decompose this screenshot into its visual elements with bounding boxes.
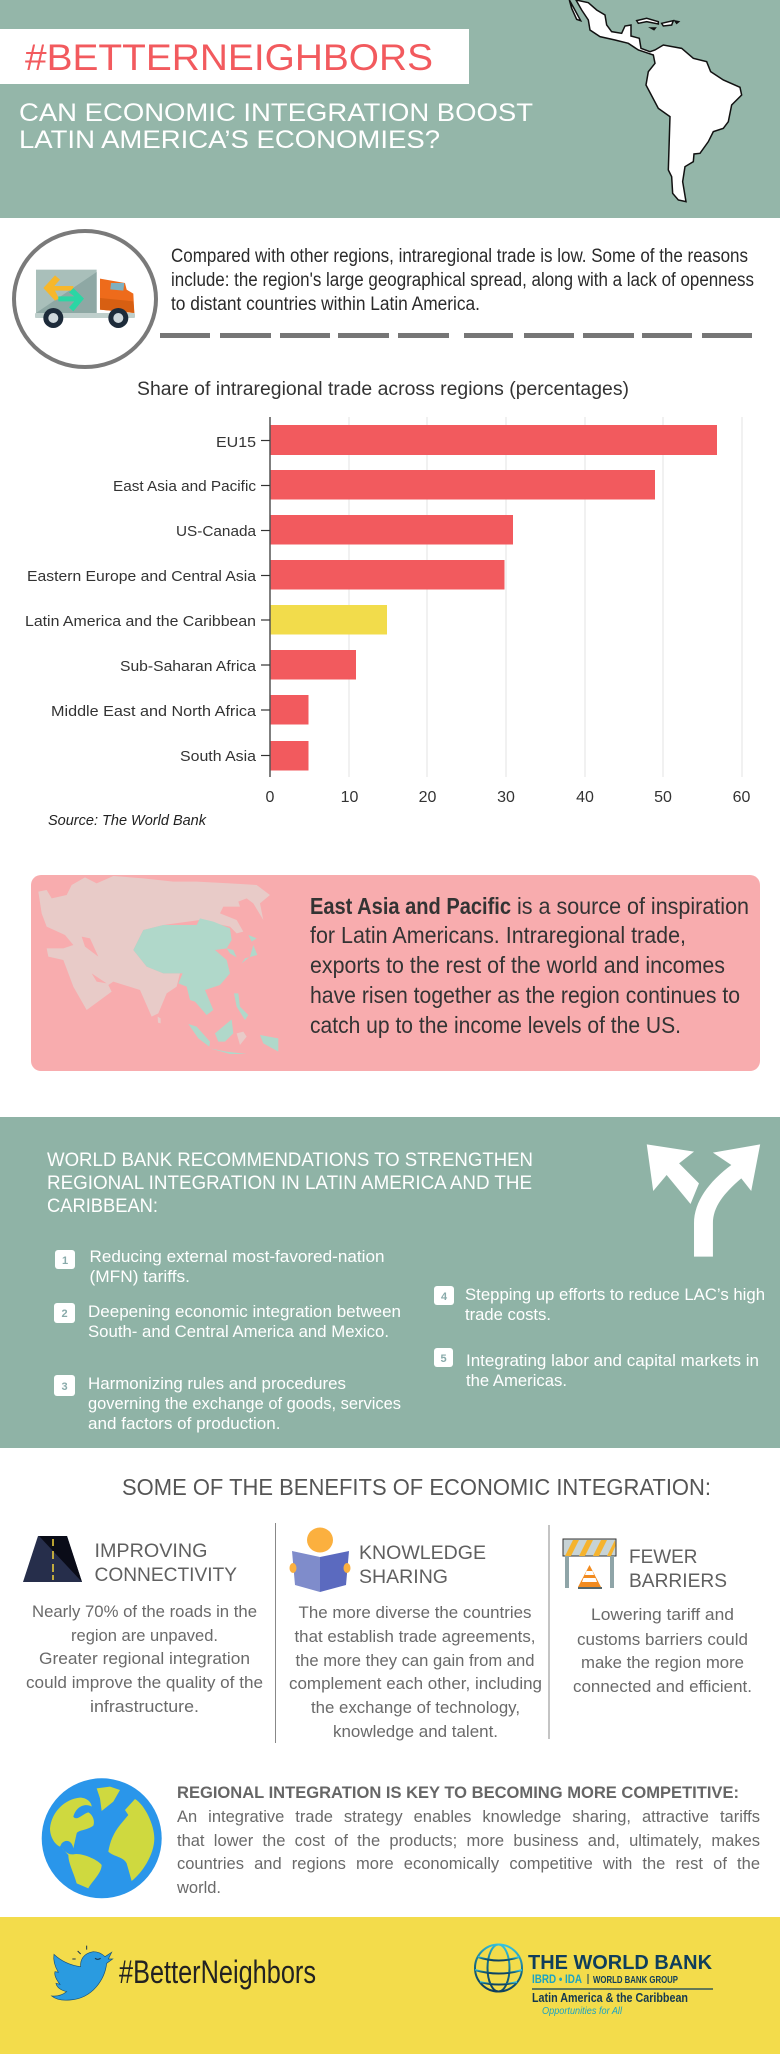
item 5: 5 — [440, 1353, 447, 1365]
item 2: Deepening economic integration between — [88, 1303, 401, 1321]
benefit: fewer barriers: Lowering tariff and — [591, 1606, 734, 1624]
source note: Source: The World Bank — [48, 812, 207, 829]
intro text — [171, 246, 754, 315]
benefits heading: SOME OF THE BENEFITS OF ECONOMIC INTEGRATION: — [122, 1474, 711, 1500]
benefit: knowledge sharing: complement each other, including — [289, 1675, 542, 1693]
axis numbers: 40 — [576, 789, 594, 806]
benefit: fewer barriers: connected and efficient. — [573, 1678, 752, 1696]
icon: road barrier — [563, 1539, 616, 1589]
benefit: improving connectivity: could improve the quality of the — [26, 1674, 263, 1692]
title: CAN ECONOMIC INTEGRATION BOOST — [19, 99, 533, 127]
category labels: Latin America and the Caribbean — [25, 613, 256, 630]
closing paragraph: countries and regions more economically competitive with the rest of the — [177, 1855, 760, 1873]
axis numbers: 20 — [419, 789, 436, 806]
benefit: fewer barriers: FEWER — [629, 1547, 698, 1568]
icon: truck in circle — [14, 231, 156, 367]
benefit: knowledge sharing: that establish trade agreements, — [294, 1628, 536, 1646]
item 1: (MFN) tariffs. — [90, 1268, 190, 1286]
axis numbers: 0 — [266, 789, 275, 806]
closing paragraph: world. — [177, 1879, 221, 1897]
panel text: for Latin Americans. Intraregional trade, — [310, 922, 686, 948]
item 5 — [434, 1348, 759, 1390]
item 1: Reducing external most-favored-nation — [90, 1248, 384, 1266]
item 3: governing the exchange of goods, services — [88, 1395, 401, 1413]
benefit: improving connectivity: Nearly 70% of the roads in the — [32, 1603, 257, 1621]
item 1 — [55, 1248, 384, 1286]
icon: road — [23, 1536, 82, 1582]
benefit: knowledge sharing: The more diverse the countries — [298, 1604, 532, 1622]
benefit: knowledge sharing: SHARING — [359, 1567, 448, 1588]
benefit: knowledge sharing: knowledge and talent. — [333, 1723, 498, 1741]
category labels — [25, 434, 257, 765]
recommendations heading: WORLD BANK RECOMMENDATIONS TO STRENGTHEN — [47, 1149, 533, 1171]
chart title: Share of intraregional trade across regions (percentages) — [137, 379, 629, 400]
benefit: improving connectivity: Greater regional integration — [39, 1650, 250, 1668]
World Bank logo: THE WORLD BANK — [528, 1952, 713, 1974]
intro text: to distant countries within Latin America. — [171, 294, 480, 315]
header panel — [0, 0, 780, 218]
category labels: US-Canada — [176, 523, 257, 540]
World Bank logo: WORLD BANK GROUP — [593, 1974, 678, 1986]
icon: forking arrows — [647, 1144, 760, 1257]
item 4: 4 — [441, 1291, 448, 1303]
item 3: Harmonizing rules and procedures — [88, 1375, 346, 1393]
icon: person reading — [290, 1528, 350, 1592]
hashtag banner: #BETTERNEIGHBORS — [25, 37, 433, 78]
axis numbers: 10 — [341, 789, 358, 806]
item 3: 3 — [61, 1381, 68, 1393]
axis numbers: 30 — [497, 789, 515, 806]
benefit: knowledge sharing: the exchange of technology, — [311, 1699, 520, 1717]
panel text: have risen together as the region continues to — [310, 982, 740, 1008]
category labels: Eastern Europe and Central Asia — [27, 568, 257, 585]
closing paragraph: An integrative trade strategy enables knowledge sharing, attractive tariffs — [177, 1808, 760, 1826]
item 1: 1 — [62, 1255, 68, 1267]
benefit: knowledge sharing: the more they can gain from and — [296, 1652, 534, 1670]
icon: map of Latin America — [569, 0, 742, 202]
panel text: catch up to the income levels of the US. — [310, 1012, 681, 1038]
item 2 — [54, 1303, 401, 1341]
recommendations heading: REGIONAL INTEGRATION IN LATIN AMERICA AND THE — [47, 1172, 532, 1194]
benefit: improving connectivity: CONNECTIVITY — [94, 1565, 237, 1586]
closing paragraph: that lower the cost of the products; more business and, ultimately, makes — [177, 1832, 760, 1850]
World Bank logo: Latin America & the Caribbean — [532, 1991, 688, 2005]
axis numbers: 60 — [733, 789, 750, 806]
recommendations heading: CARIBBEAN: — [47, 1195, 158, 1217]
bars — [270, 425, 717, 770]
category labels: South Asia — [180, 748, 257, 765]
category labels: Sub-Saharan Africa — [120, 658, 257, 675]
World Bank logo: IBRD • IDA — [532, 1972, 582, 1986]
hashtag banner — [0, 29, 469, 84]
category labels: Middle East and North Africa — [51, 703, 257, 720]
icon: globe — [42, 1778, 162, 1898]
panel: recommendations — [0, 1117, 780, 1448]
benefit: improving connectivity: infrastructure. — [90, 1698, 199, 1716]
panel text: East Asia and Pacific — [310, 893, 511, 919]
item 4: trade costs. — [465, 1306, 551, 1324]
item 3: and factors of production. — [88, 1415, 280, 1433]
item 5: the Americas. — [466, 1372, 567, 1390]
benefit: fewer barriers — [563, 1539, 752, 1696]
axis numbers — [266, 789, 750, 806]
axis numbers: 50 — [654, 789, 672, 806]
benefit: knowledge sharing: KNOWLEDGE — [359, 1543, 486, 1564]
icon: map of Asia — [38, 876, 278, 1054]
title — [19, 99, 533, 154]
category labels: EU15 — [216, 434, 256, 451]
benefit: knowledge sharing — [289, 1528, 542, 1741]
panel: East Asia and Pacific — [31, 875, 760, 1071]
closing heading: REGIONAL INTEGRATION IS KEY TO BECOMING MORE COMPETITIVE: — [177, 1784, 739, 1802]
item 5: Integrating labor and capital markets in — [466, 1352, 759, 1370]
item 4 — [434, 1286, 765, 1324]
footer panel — [0, 1917, 780, 2054]
title: LATIN AMERICA’S ECONOMIES? — [19, 126, 440, 154]
item 3 — [54, 1375, 401, 1433]
footer hashtag: #BetterNeighbors — [119, 1954, 316, 1990]
panel text: is a source of inspiration — [517, 893, 749, 919]
panel text: exports to the rest of the world and incomes — [310, 952, 725, 978]
bar chart — [25, 417, 750, 806]
item 2: South- and Central America and Mexico. — [88, 1323, 389, 1341]
recommendations heading — [47, 1149, 533, 1217]
benefit: improving connectivity: IMPROVING — [94, 1541, 208, 1562]
World Bank logo: Opportunities for All — [542, 2005, 623, 2017]
benefit: improving connectivity: region are unpaved. — [71, 1627, 218, 1645]
benefit: fewer barriers: BARRIERS — [629, 1571, 727, 1592]
panel text — [310, 893, 749, 1038]
category labels: East Asia and Pacific — [113, 478, 257, 495]
closing paragraph — [177, 1808, 760, 1897]
item 2: 2 — [61, 1308, 68, 1320]
benefit: improving connectivity — [23, 1536, 263, 1716]
item 4: Stepping up efforts to reduce LAC’s high — [465, 1286, 765, 1304]
icon: twitter bird — [52, 1946, 113, 2000]
benefit: fewer barriers: make the region more — [581, 1654, 744, 1672]
World Bank logo — [475, 1944, 713, 2017]
benefit: fewer barriers: customs barriers could — [577, 1631, 748, 1649]
